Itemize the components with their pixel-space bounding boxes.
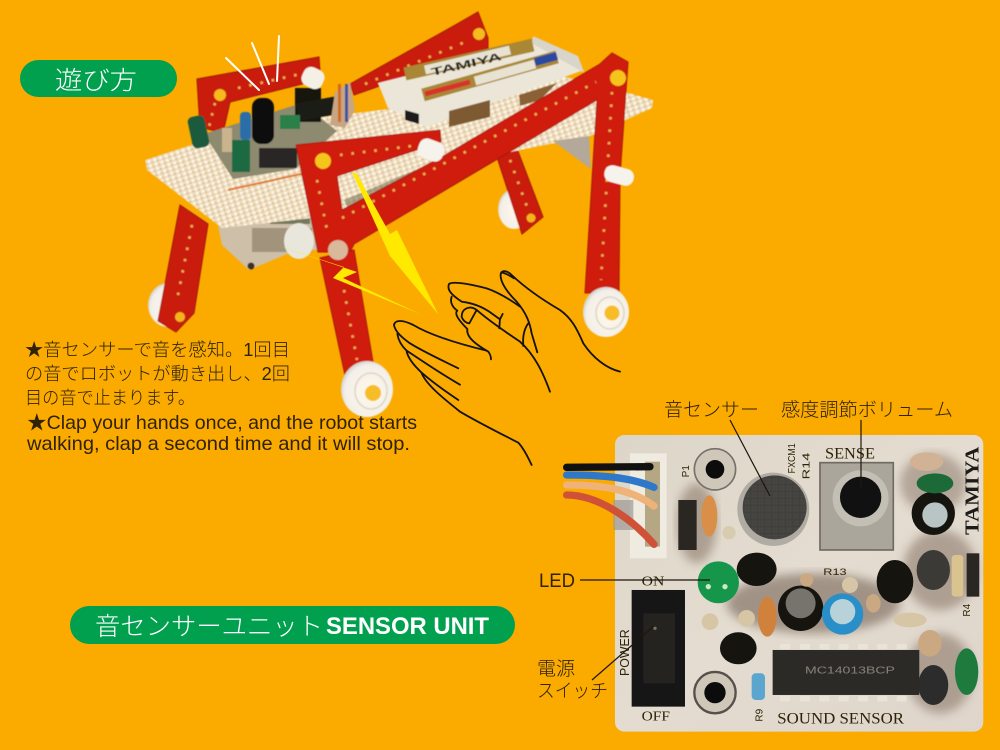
board base (615, 435, 983, 732)
front left leg (320, 250, 373, 375)
japanese description: ★音センサーで音を感知。1回目 (25, 340, 290, 360)
integrated circuit: MC14013BCP (805, 665, 895, 676)
board silkscreen text: SOUND SENSOR (777, 710, 905, 727)
front frame diagonal and arm (296, 53, 628, 293)
sound lines (226, 36, 279, 90)
rear deck corner behind battery (530, 36, 584, 72)
white pegs (284, 64, 636, 260)
callout: sound sensor: 音センサー (664, 399, 759, 421)
english description (26, 412, 417, 455)
sensor unit circuit board photo (567, 435, 983, 732)
front right wheel (583, 287, 629, 337)
board silkscreen text: FXCM1 (787, 443, 798, 473)
callout: power switch: スイッチ (537, 681, 608, 702)
board silkscreen text: R14 (801, 452, 812, 479)
pill heading: sensor unit (70, 606, 515, 644)
pill heading: sensor unit: 音センサーユニット (95, 613, 323, 641)
board silkscreen text: R13 (823, 567, 847, 577)
lightning bolt: lower (273, 244, 420, 314)
callout: LED: LED (539, 571, 575, 592)
front left wheel (341, 361, 393, 417)
callout: power switch: 電源 (537, 658, 575, 680)
rear arch with sound lines origin (197, 57, 320, 133)
pill heading: how to play: 遊び方 (55, 67, 137, 95)
LED (698, 561, 739, 603)
capacitors (752, 473, 978, 700)
rear right wheel and leg (496, 146, 543, 234)
transistors (720, 550, 950, 705)
battery box (378, 44, 581, 127)
board silkscreen text: ON (642, 574, 665, 589)
callout: sensitivity volume: 感度調節ボリューム (781, 399, 953, 421)
board silkscreen text: POWER (618, 629, 632, 676)
mounting holes (694, 449, 736, 713)
sound sensor microphone (737, 473, 809, 546)
callout: sound sensor (664, 399, 770, 496)
lightning bolt: upper (352, 172, 438, 314)
battery box: TAMIYA (430, 51, 503, 79)
rear long bar (350, 12, 488, 95)
sensitivity knob (820, 463, 893, 550)
callouts with leader lines (537, 399, 953, 702)
board silkscreen text: SENSE (825, 445, 875, 462)
pill heading: sensor unit: SENSOR UNIT (326, 613, 489, 640)
japanese description: 目の音で止まります。 (25, 388, 195, 408)
circuit board on robot (187, 82, 355, 179)
pill heading: how to play (20, 60, 177, 97)
english description: walking, clap a second time and it will stop. (26, 433, 410, 455)
icon: clapping hands (394, 271, 620, 465)
integrated circuit (773, 644, 919, 701)
japanese description: の音でロボットが動き出し、2回 (25, 364, 290, 384)
board silkscreen text (618, 443, 983, 727)
robot photo illustration (145, 12, 653, 417)
board silkscreen text: P1 (681, 465, 692, 477)
clear gearbox under the deck (218, 205, 335, 270)
english description: ★Clap your hands once, and the robot starts (27, 412, 417, 434)
board silkscreen text: OFF (642, 709, 670, 724)
resistors (702, 452, 963, 657)
japanese description (25, 340, 290, 408)
description text (25, 340, 417, 455)
board silkscreen text: R9 (755, 708, 766, 722)
board silkscreen text: TAMIYA (961, 446, 983, 535)
clear deck (145, 70, 653, 228)
diode and capacitor (678, 495, 736, 550)
rear left wheel and leg (148, 205, 208, 332)
board silkscreen text: R4 (962, 603, 973, 617)
wires and connector (567, 453, 667, 558)
power switch (632, 590, 685, 707)
callout: power switch (537, 626, 654, 702)
